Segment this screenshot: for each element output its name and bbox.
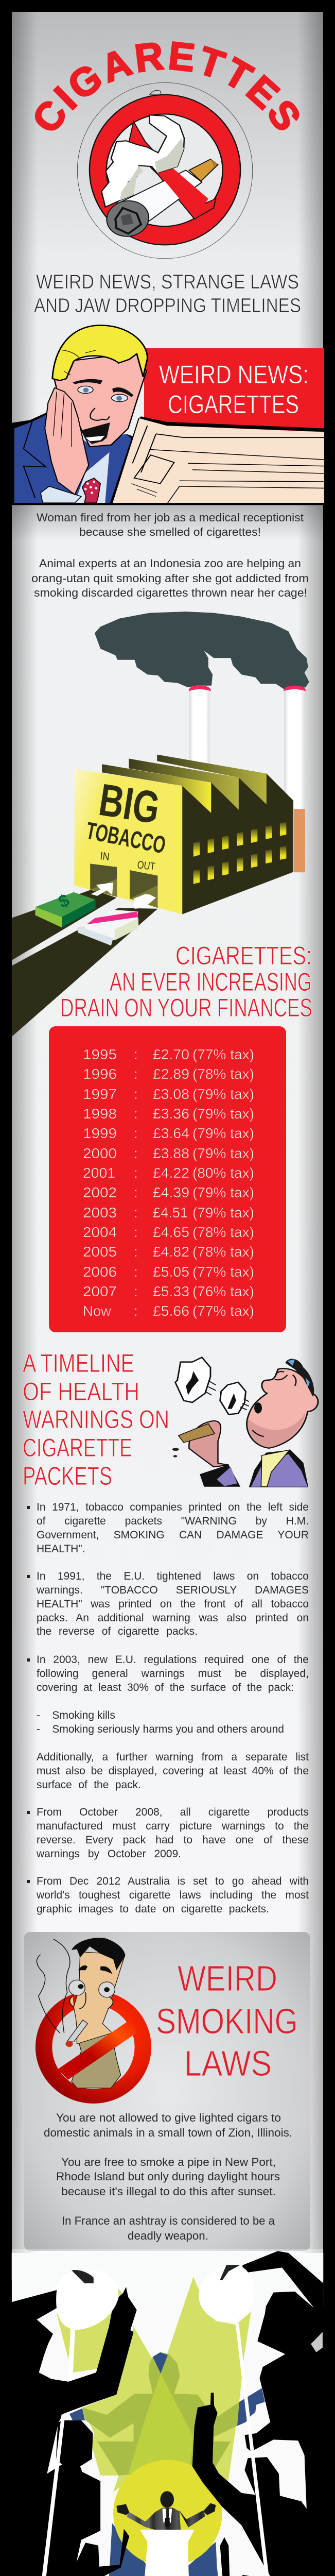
text: 1971 warning: In 1971, tobacco companies printed on the left side <box>37 1501 309 1513</box>
smoke <box>101 115 184 207</box>
text: 2012 warning: graphic images to date on cigarette packets. <box>37 1903 269 1915</box>
smoke puffs <box>175 1358 249 1414</box>
price rows: : <box>134 1165 138 1181</box>
text: weird news stories: because she smelled of cigarettes! <box>79 526 261 538</box>
text: factory signage: IN <box>99 850 110 863</box>
price rows: (77% tax) <box>192 1303 254 1319</box>
price rows: 1997 <box>83 1086 117 1102</box>
price rows: £4.65 <box>153 1224 189 1240</box>
text: general warnings list: - Smoking seriously harms you and others around <box>37 1723 284 1735</box>
price rows: 2006 <box>83 1264 117 1280</box>
price rows: : <box>134 1066 138 1082</box>
cigarette <box>99 159 218 244</box>
smoke cloud <box>95 612 309 689</box>
bullets <box>27 1506 30 1883</box>
icon: no smoking sign <box>77 82 253 259</box>
podium <box>140 2530 195 2576</box>
price rows: £4.51 <box>153 1205 188 1221</box>
text: weird laws: deadly weapon. <box>128 2229 208 2242</box>
price rows: (78% tax) <box>192 1066 254 1082</box>
text: weird laws: In France an ashtray is considered to be a <box>62 2214 275 2227</box>
heading: weird news cigarettes: CIGARETTES <box>168 390 299 419</box>
text: weird news stories: smoking discarded cigarettes thrown near her cage! <box>34 586 307 599</box>
hand <box>45 388 89 495</box>
price rows: 1995 <box>83 1046 117 1062</box>
hand and cigar <box>172 1421 228 1467</box>
text: general warnings list <box>37 1709 284 1735</box>
price rows: £3.88 <box>153 1145 189 1161</box>
price rows: : <box>134 1145 138 1161</box>
text: weird laws: Rhode Island but only during daylight hours <box>56 2170 280 2183</box>
cigarette pack <box>77 910 138 945</box>
text: 2012 warning <box>37 1875 309 1915</box>
arrow: money in <box>91 883 113 896</box>
text: 1991 warning <box>37 1570 309 1637</box>
price rows: (79% tax) <box>192 1145 254 1161</box>
text: 2008 warning: reverse. Every pack had to have one of these <box>37 1834 309 1846</box>
price rows: £4.22 <box>153 1165 189 1181</box>
text: factory signage: TOBACCO <box>84 817 168 859</box>
chimneys <box>189 686 306 872</box>
heading: timeline of health warnings: PACKETS <box>23 1462 112 1490</box>
text: 2008 warning <box>37 1806 309 1860</box>
text: weird laws: You are not allowed to give lighted cigars to <box>56 2111 281 2124</box>
price rows: : <box>134 1106 138 1122</box>
price rows: (77% tax) <box>192 1264 254 1280</box>
price rows: (76% tax) <box>192 1283 254 1299</box>
text: 1991 warning: HEALTH" was printed on the front of all tobacco <box>37 1598 309 1610</box>
text: factory signage: OUT <box>136 859 156 873</box>
icon: dollar sign: $ <box>56 890 73 912</box>
price rows: £4.39 <box>153 1184 189 1200</box>
heading: weird news cigarettes: WEIRD NEWS: <box>159 360 309 389</box>
price rows: 2001 <box>83 1165 115 1181</box>
price rows: : <box>134 1244 138 1260</box>
price rows: £3.36 <box>153 1106 189 1122</box>
price rows: 2003 <box>83 1205 117 1221</box>
price rows <box>83 1046 254 1319</box>
heading: weird smoking laws: WEIRD <box>178 1958 277 1998</box>
price rows: 1999 <box>83 1125 117 1141</box>
price rows: (79% tax) <box>192 1184 254 1200</box>
price rows: £4.82 <box>153 1244 189 1260</box>
price rows: 2005 <box>83 1244 117 1260</box>
text: 1971 warning: Government, SMOKING CAN DAMAGE YOUR <box>37 1529 309 1541</box>
heading: weird smoking laws: LAWS <box>184 2043 272 2083</box>
left crowd silhouette <box>0 2287 137 2576</box>
heading: subtitle <box>34 271 301 317</box>
money stack <box>36 892 96 927</box>
doors <box>90 863 157 908</box>
text: additional warning: Additionally, a further warning from a separate list <box>37 1751 309 1763</box>
text: general warnings list: - Smoking kills <box>37 1709 115 1721</box>
spotlight heads <box>56 2265 254 2330</box>
text: 2003 warning: covering at least 30% of the surface of the pack: <box>37 1682 294 1693</box>
heading: timeline of health warnings <box>23 1349 169 1490</box>
price rows: : <box>134 1046 138 1062</box>
price rows: (79% tax) <box>192 1086 254 1102</box>
text: 1991 warning: the reverse of cigarette packs. <box>37 1625 198 1637</box>
text: 1971 warning: HEALTH". <box>37 1543 85 1555</box>
light cones <box>82 2277 251 2492</box>
price rows: 1996 <box>83 1066 117 1082</box>
text: weird laws: You are free to smoke a pipe in New Port, <box>61 2156 276 2168</box>
price rows: : <box>134 1224 138 1240</box>
text: weird news stories: Animal experts at an Indonesia zoo are helping an <box>39 557 301 570</box>
light stands <box>34 2324 292 2576</box>
right crowd silhouette <box>192 2292 335 2576</box>
heading: weird smoking laws <box>156 1958 298 2083</box>
panel: weird news red banner <box>144 348 324 436</box>
text: additional warning <box>37 1751 309 1791</box>
price rows: £5.33 <box>153 1283 189 1299</box>
price rows: (79% tax) <box>192 1125 254 1141</box>
price rows: £5.66 <box>153 1303 189 1319</box>
text: weird laws: because it's illegal to do this after sunset. <box>61 2185 276 2198</box>
price rows: : <box>134 1125 138 1141</box>
blue highlights <box>69 2352 265 2576</box>
price rows: 2004 <box>83 1224 117 1240</box>
panel: weird smoking laws <box>24 1932 310 2251</box>
price rows: £3.08 <box>153 1086 189 1102</box>
projected shadow <box>82 2352 239 2476</box>
heading: timeline of health warnings: CIGARETTE <box>23 1433 132 1462</box>
price rows: £2.89 <box>153 1066 189 1082</box>
text: 1991 warning: warnings. "TOBACCO SERIOUSLY DAMAGES <box>37 1584 309 1596</box>
text: 1991 warning: packs. An additional warning was also printed on <box>37 1612 309 1624</box>
price rows: £5.05 <box>153 1264 189 1280</box>
windows <box>193 822 286 884</box>
text: 1971 warning <box>37 1501 309 1555</box>
text: weird laws <box>44 2111 292 2242</box>
speaker <box>116 2491 216 2530</box>
spotlight <box>113 2460 222 2567</box>
price rows: : <box>134 1086 138 1102</box>
price rows: : <box>134 1283 138 1299</box>
heading: timeline of health warnings: A TIMELINE <box>23 1349 134 1378</box>
price rows: 1998 <box>83 1106 117 1122</box>
text: factory signage <box>84 774 168 873</box>
price rows: : <box>134 1205 138 1221</box>
price rows: £2.70 <box>153 1046 189 1062</box>
arrow: cigarettes out <box>134 894 156 909</box>
front facade <box>74 769 182 914</box>
roof <box>102 755 267 813</box>
illustration: big tobacco factory <box>12 612 309 1037</box>
text: 2003 warning: following general warnings must be displayed, <box>37 1668 309 1680</box>
head <box>247 1359 318 1448</box>
side wall <box>182 773 293 914</box>
price rows: (79% tax) <box>192 1205 254 1221</box>
text: 2003 warning: In 2003, new E.U. regulations required one of the <box>37 1654 309 1666</box>
title: curved CIGARETTES: CIGARETTES <box>35 41 299 131</box>
text: 2008 warning: manufactured must carry picture warnings to the <box>37 1820 309 1832</box>
price rows: (78% tax) <box>192 1244 254 1260</box>
heading: an ever increasing drain <box>60 941 312 1022</box>
text: 1991 warning: In 1991, the E.U. tightened laws on tobacco <box>37 1570 309 1582</box>
price rows: 2007 <box>83 1283 117 1299</box>
price rows: Now <box>83 1303 112 1319</box>
panel: main light background <box>12 505 323 2298</box>
price rows: : <box>134 1184 138 1200</box>
price rows: (80% tax) <box>192 1165 254 1181</box>
text: factory signage: BIG <box>96 774 163 834</box>
jacket <box>200 1450 308 1487</box>
price rows: (78% tax) <box>192 1224 254 1240</box>
text: 2012 warning: world's toughest cigarette laws including the most <box>37 1889 309 1901</box>
heading: weird smoking laws: SMOKING <box>156 2001 298 2041</box>
illustration: crowd and speaker silhouette <box>0 2249 335 2576</box>
text: 2012 warning: From Dec 2012 Australia is set to go ahead with <box>37 1875 309 1887</box>
text: weird news stories: orang-utan quit smoking after she got addicted from <box>31 572 309 585</box>
illustration: man blowing smoke <box>172 1358 318 1487</box>
price rows: : <box>134 1264 138 1280</box>
text: additional warning: must also be displayed, covering at least 40% of the <box>37 1765 309 1777</box>
icon: man in prohibition sign <box>37 1938 143 2096</box>
price rows: : <box>134 1303 138 1319</box>
text: 1971 warning: of cigarette packets "WARNING by H.M. <box>37 1515 309 1527</box>
text: weird laws: domestic animals in a small town of Zion, Illinois. <box>44 2126 292 2139</box>
price rows: (79% tax) <box>192 1106 254 1122</box>
panel: header and weird news background <box>12 12 323 505</box>
text: 2008 warning: warnings by October 2009. <box>37 1848 181 1860</box>
price rows: (77% tax) <box>192 1046 254 1062</box>
price rows: 2002 <box>83 1184 117 1200</box>
text: additional warning: surface of the pack. <box>37 1779 141 1791</box>
newspaper <box>112 418 324 503</box>
text: weird news stories: Woman fired from her job as a medical receptionist <box>37 511 304 524</box>
small raised hand <box>220 2537 270 2576</box>
heading: timeline of health warnings: OF HEALTH <box>23 1377 139 1406</box>
heading: weird news cigarettes <box>159 360 309 419</box>
text: weird news stories <box>31 511 309 599</box>
price rows: £3.64 <box>153 1125 189 1141</box>
illustration: shocked man reading a newspaper <box>12 325 325 505</box>
prohibition slash <box>58 2020 137 2080</box>
text: 2008 warning: From October 2008, all cigarette products <box>37 1806 309 1818</box>
heading: subtitle: WEIRD NEWS, STRANGE LAWS <box>36 271 299 293</box>
road <box>12 889 157 1037</box>
text: 2003 warning <box>37 1654 309 1693</box>
price rows: 2000 <box>83 1145 117 1161</box>
heading: timeline of health warnings: WARNINGS ON <box>23 1405 169 1434</box>
panel: cigarette price table <box>49 1026 286 1332</box>
raised arm <box>242 2251 323 2308</box>
